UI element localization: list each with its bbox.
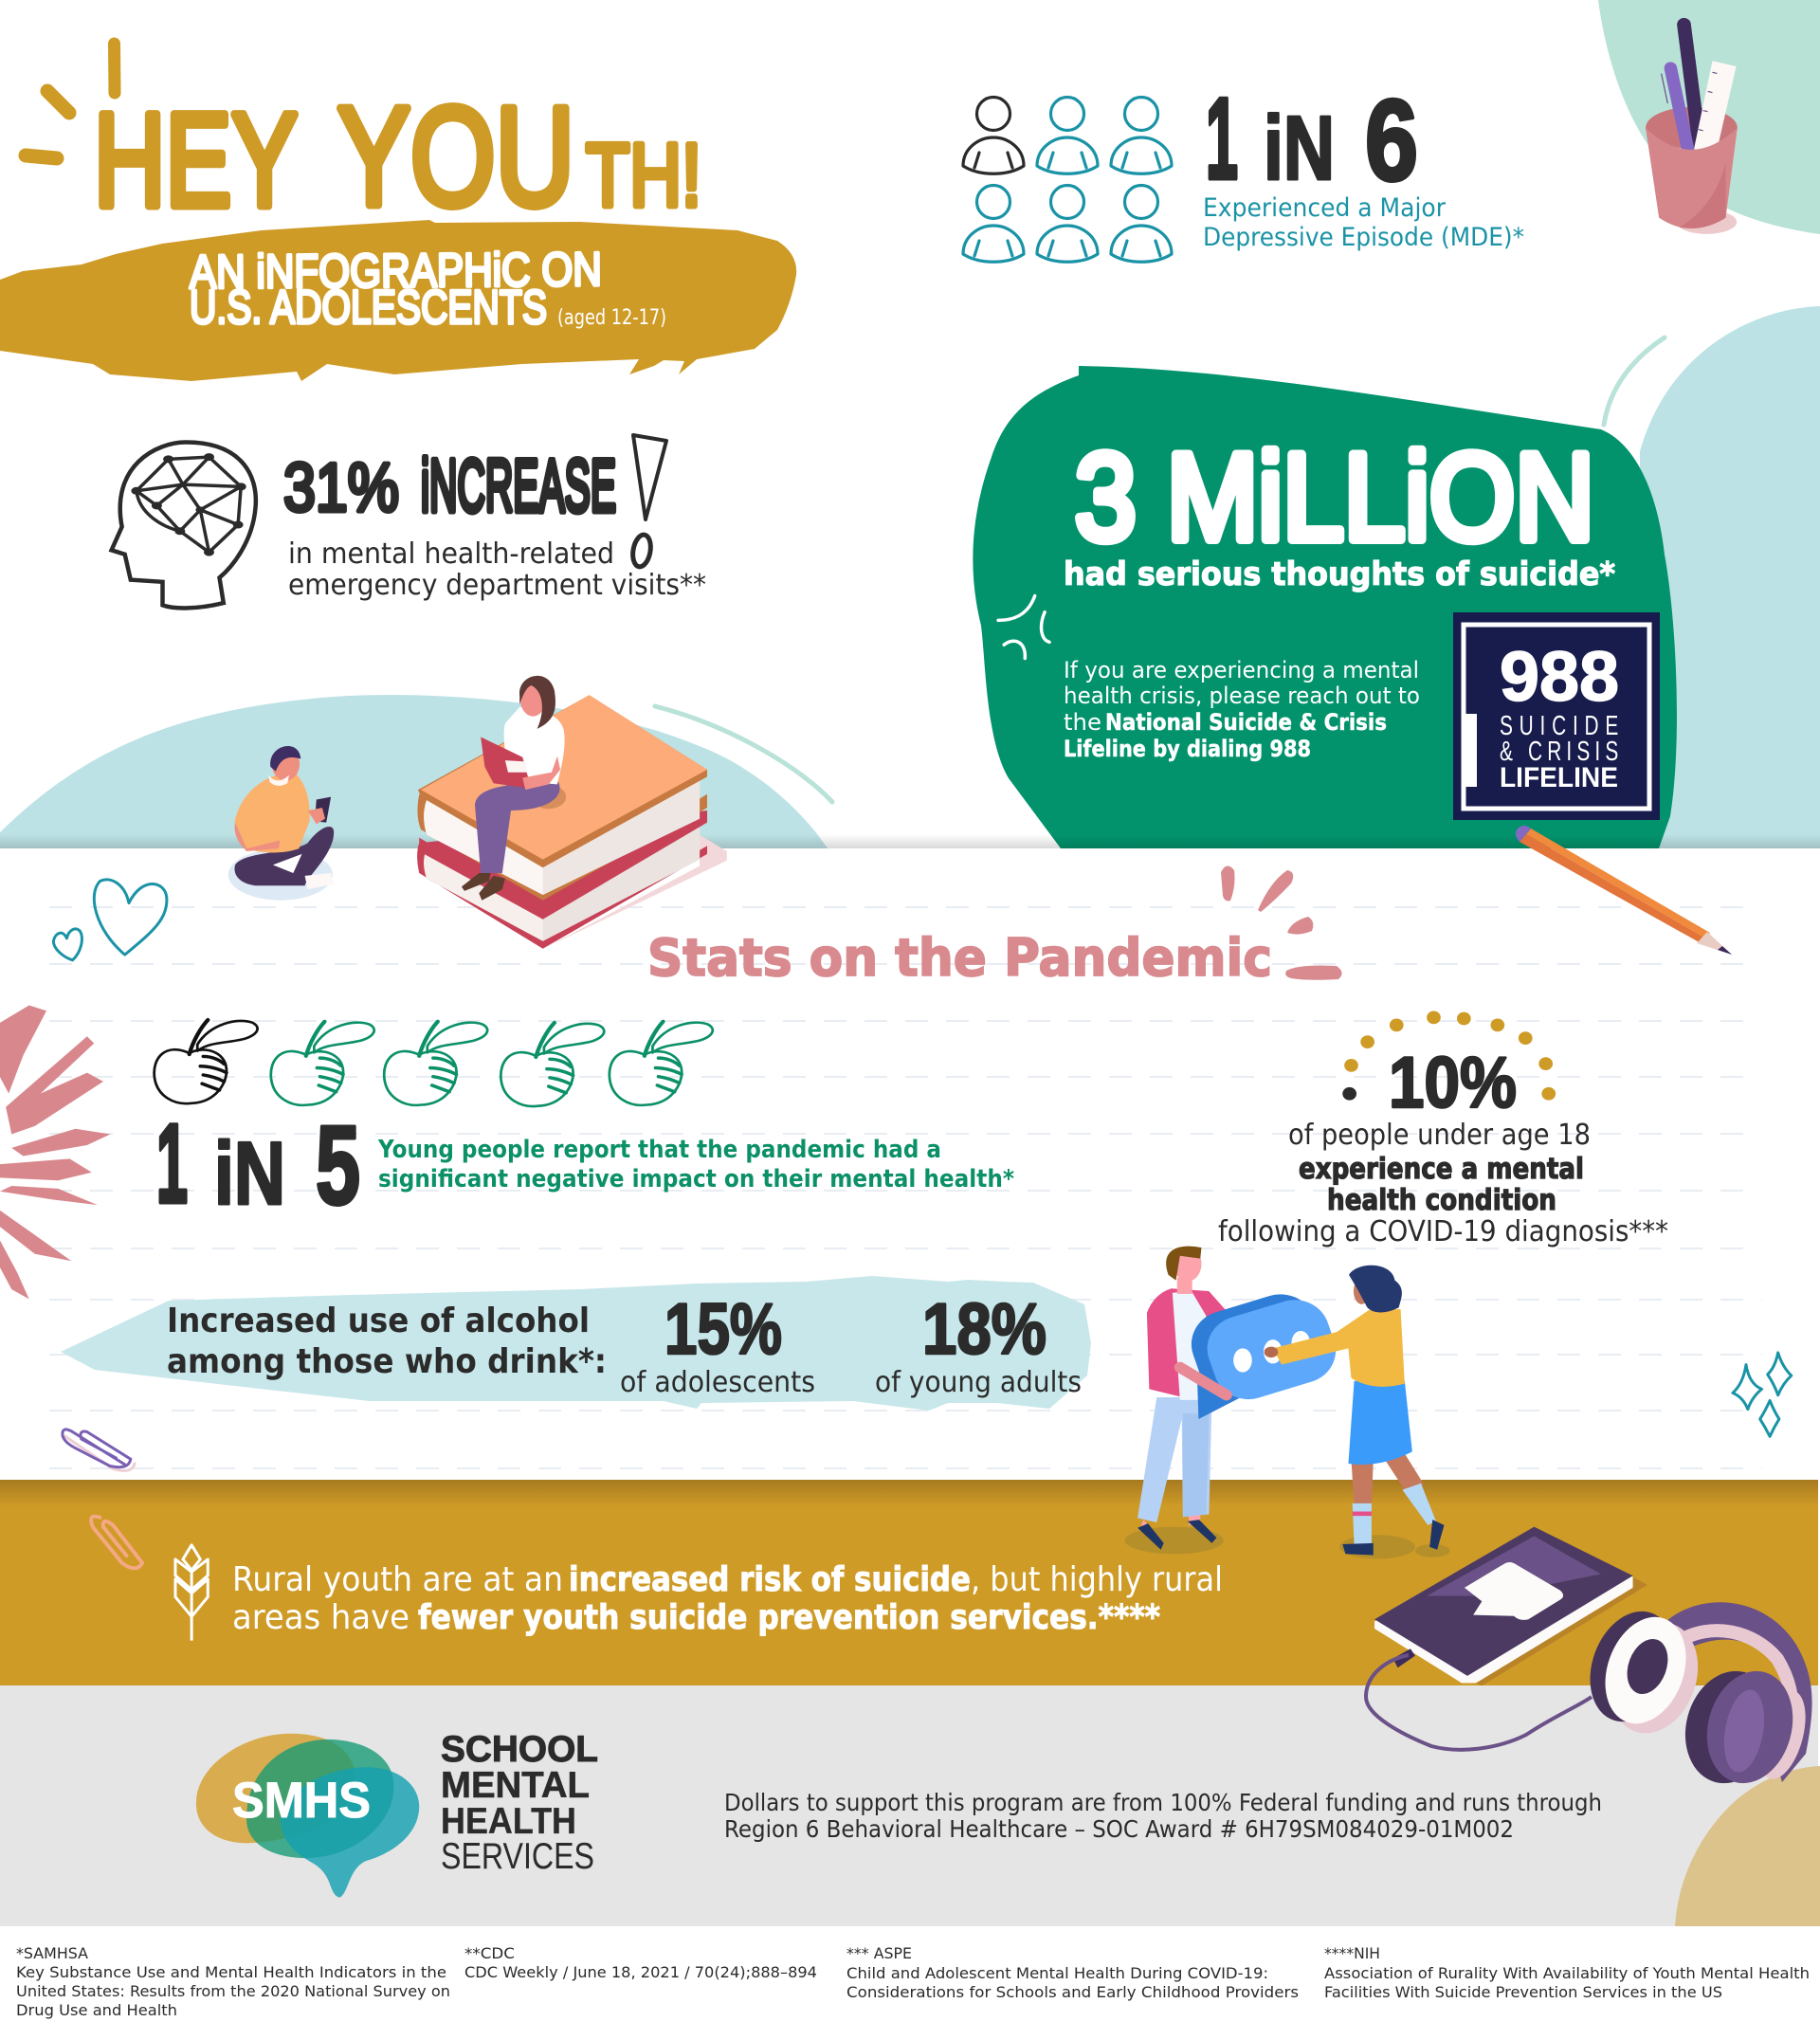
icon: six people [963, 97, 1172, 262]
stat: 1 in 6 [963, 74, 1524, 262]
footnote: SAMHSA: Key Substance Use and Mental Health Indicators in the [16, 1963, 446, 1981]
stat description: in mental health-related [288, 537, 614, 571]
title block [0, 44, 796, 381]
10% description: following a COVID-19 diagnosis*** [1218, 1215, 1668, 1248]
stat: 15% of adolescents: 15% [664, 1289, 782, 1370]
woman figure [462, 676, 566, 901]
rural text: , but highly rural [971, 1560, 1223, 1599]
footnote: NIH [1324, 1944, 1810, 2001]
icon: exclamation mark [630, 435, 666, 568]
icon: head with brain network [112, 442, 256, 608]
title: hey youth: TH! [586, 125, 701, 225]
ground shadows [1125, 1527, 1450, 1558]
icon: big and small hearts [53, 880, 167, 960]
988 lifeline logo: LIFELINE [1500, 762, 1618, 793]
red book [417, 811, 707, 949]
notebook ruled lines [49, 907, 1762, 1468]
crisis text: If you are experiencing a mental [1064, 657, 1419, 683]
footnote: ASPE: Child and Adolescent Mental Health During COVID-19: [846, 1964, 1268, 1982]
rural text: Rural youth are at an [232, 1560, 563, 1599]
1 in 5 number: 1 [156, 1102, 188, 1227]
background: light blue blob right [1640, 306, 1820, 848]
footnote: SAMHSA: *SAMHSA [16, 1944, 88, 1962]
subtitle text: U.S. ADOLESCENTS [190, 281, 547, 334]
illustration: earphone cable [1366, 1655, 1592, 1750]
green description: significant negative impact on their mental health* [378, 1165, 1014, 1193]
stat heading: iNCREASE [421, 444, 616, 527]
icon: wheat [175, 1545, 208, 1641]
footnote: ASPE: Considerations for Schools and Early Childhood Providers [846, 1983, 1299, 2001]
footnote: ASPE: *** ASPE [846, 1944, 912, 1962]
988 lifeline logo [1453, 612, 1660, 820]
funding text: Dollars to support this program are from 100% Federal funding and runs through [724, 1789, 1602, 1816]
footnote: ASPE [846, 1944, 1299, 2001]
suicide thoughts line: had serious thoughts of suicide* [1064, 556, 1615, 593]
988 lifeline logo: 988 [1500, 637, 1619, 716]
rural text: fewer youth suicide prevention services.**** [418, 1598, 1160, 1637]
footnote: CDC: CDC Weekly / June 18, 2021 / 70(24);888–894 [464, 1963, 817, 1981]
crisis text: the [1064, 709, 1101, 736]
teal description [1203, 193, 1524, 252]
stat heading [283, 444, 616, 527]
brain shape [196, 1734, 419, 1898]
988 lifeline logo: & CRISIS [1500, 737, 1618, 767]
footnote: SAMHSA [16, 1944, 450, 2019]
stat: 15% of adolescents: of adolescents [620, 1366, 815, 1399]
teal description: Depressive Episode (MDE)* [1203, 223, 1524, 252]
blue brush background [61, 1276, 1091, 1411]
green description: Young people report that the pandemic had a [377, 1136, 941, 1164]
subtitle text: (aged 12-17) [557, 306, 666, 330]
1 in 5 number: 5 [316, 1103, 360, 1229]
10% description: of people under age 18 [1288, 1119, 1591, 1152]
footnote: SAMHSA: Drug Use and Health [16, 2001, 177, 2019]
footnote: SAMHSA: United States: Results from the 2020 National Survey on [16, 1982, 450, 2000]
background: mint arc right [1604, 337, 1665, 425]
background: light blue hill left [0, 695, 828, 848]
program name: HEALTH [441, 1801, 576, 1842]
crisis text: National Suicide & Crisis [1105, 709, 1387, 736]
1 in 5 number: iN [214, 1123, 285, 1223]
10% description [1218, 1119, 1668, 1248]
stat: 1 in 5 [155, 1020, 1014, 1229]
panel: alcohol use [61, 1276, 1091, 1411]
alcohol heading [167, 1302, 607, 1381]
crisis text: Lifeline by dialing 988 [1064, 736, 1311, 762]
dotted arc [1342, 1011, 1556, 1101]
decorative pink spiky burst [0, 1005, 110, 1299]
teal description: Experienced a Major [1203, 193, 1447, 223]
green blob [973, 366, 1677, 848]
white section band [0, 848, 1820, 1480]
illustration: pencil [1516, 826, 1732, 955]
footnote: NIH: Association of Rurality With Availability of Youth Mental Health [1324, 1964, 1810, 1982]
stat: 18% of young adults: 18% [922, 1289, 1046, 1370]
program name: SERVICES [441, 1836, 594, 1877]
icon: white squiggles [998, 596, 1049, 659]
alcohol heading: among those who drink*: [167, 1342, 607, 1381]
illustration: boy with phone [228, 746, 334, 901]
rural text [232, 1560, 1223, 1637]
footnote: NIH: Facilities With Suicide Prevention Services in the US [1324, 1983, 1722, 2001]
program name: MENTAL [441, 1765, 590, 1806]
title: hey youth [94, 79, 701, 235]
stat description [288, 537, 706, 602]
green description [377, 1136, 1014, 1193]
icon: teal sparkles [1733, 1353, 1792, 1436]
icon: pencil cup [1646, 25, 1738, 234]
crisis text: health crisis, please reach out to [1064, 683, 1420, 709]
stat description: emergency department visits** [288, 569, 706, 602]
stat: 18% of young adults: of young adults [875, 1366, 1082, 1399]
panel: gray program footer band [0, 1685, 1818, 1926]
decorative tan blob [1675, 1766, 1820, 1926]
rural text: areas have [232, 1598, 410, 1637]
stat: 10% [1218, 1011, 1668, 1248]
footnote: NIH: ****NIH [1324, 1944, 1380, 1962]
funding text [724, 1789, 1602, 1843]
gold brush banner [0, 220, 796, 381]
988 lifeline logo: SUICIDE [1500, 711, 1618, 741]
background: mint blob top right [1598, 0, 1820, 234]
title: hey youth: HEY [94, 85, 298, 234]
program name: SCHOOL [441, 1729, 598, 1770]
10% description: health condition [1327, 1184, 1556, 1217]
SMHS logo [196, 1729, 598, 1898]
illustration: headphones [1575, 1599, 1814, 1794]
stat: 15% of adolescents [620, 1289, 815, 1399]
book shadow [546, 835, 727, 948]
decorative arc above hill [655, 706, 832, 802]
icon: orange paperclip [91, 1517, 142, 1568]
footnote: CDC [464, 1944, 817, 1981]
illustration: two people holding speech bubble [1125, 1247, 1450, 1558]
icon: row of apples [155, 1020, 713, 1106]
panel: 3 million [973, 366, 1677, 848]
stat: 31% increase [112, 435, 706, 608]
band shadow [0, 834, 1820, 848]
rural text: increased risk of suicide [569, 1560, 971, 1599]
program name [441, 1729, 598, 1877]
icon: purple paperclip [63, 1430, 135, 1470]
heading: stats on the pandemic [647, 865, 1342, 988]
10% description: experience a mental [1299, 1153, 1584, 1186]
orange book [417, 695, 707, 901]
stat heading: 31% [283, 450, 399, 526]
1 in 6 number [1206, 74, 1418, 205]
alcohol heading: Increased use of alcohol [167, 1302, 590, 1340]
panel: rural youth gold band [0, 1480, 1818, 1685]
gold band background [0, 1480, 1818, 1685]
man figure [1138, 1247, 1228, 1550]
illustration: tablet [1374, 1527, 1647, 1685]
gold band top shadow [0, 1480, 1818, 1506]
crisis text [1064, 657, 1420, 762]
10% number: 10% [1389, 1043, 1517, 1123]
pink burst [1221, 865, 1342, 980]
1 in 5 number [156, 1102, 360, 1229]
1 in 6 number: 1 [1206, 74, 1238, 203]
SMHS initials: SMHS [232, 1773, 371, 1829]
funding text: Region 6 Behavioral Healthcare – SOC Award # 6H79SM084029-01M002 [724, 1815, 1514, 1843]
footnote: CDC: **CDC [464, 1944, 515, 1962]
subtitle text [190, 243, 666, 334]
title: hey youth: YOU [337, 79, 574, 235]
1 in 6 number: 6 [1365, 76, 1418, 205]
title burst lines [26, 44, 115, 158]
stat: 18% of young adults [875, 1289, 1082, 1399]
woman figure [1265, 1266, 1445, 1555]
3 million heading: 3 MiLLiON [1075, 428, 1594, 566]
subtitle text: AN iNFOGRAPHiC ON [190, 243, 602, 299]
section heading text: Stats on the Pandemic [647, 928, 1272, 988]
speech bubble [1180, 1285, 1345, 1419]
illustration: woman reading on books [417, 676, 727, 949]
1 in 6 number: iN [1264, 98, 1335, 199]
